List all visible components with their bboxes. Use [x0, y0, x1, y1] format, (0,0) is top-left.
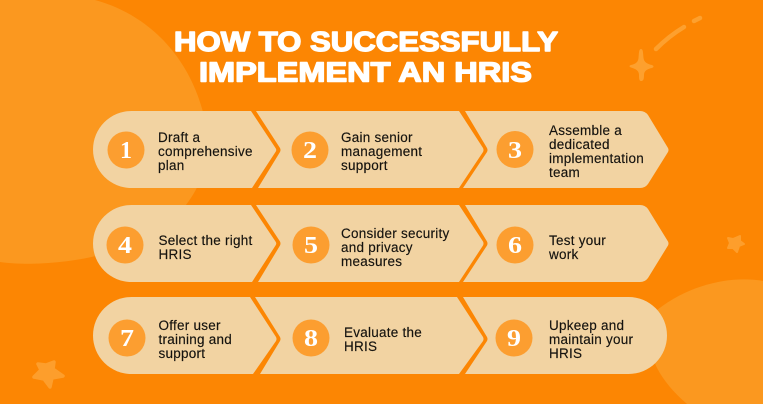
step 1: [93, 111, 276, 188]
step 7: [93, 297, 276, 374]
icon: star right: [728, 236, 744, 252]
background blob: bottom right: [650, 279, 763, 404]
step 4: Select the right: [158, 233, 253, 248]
title: IMPLEMENT AN HRIS: [199, 56, 532, 88]
step 9: HRIS: [549, 346, 582, 361]
step 3: implementation: [549, 151, 644, 166]
step 9: maintain your: [549, 332, 634, 347]
step 5: 5: [304, 233, 318, 259]
step 3: [463, 111, 668, 188]
step 9: Upkeep and: [549, 318, 624, 333]
step 2: support: [341, 158, 388, 173]
step 6: work: [548, 247, 579, 262]
step 1: comprehensive: [158, 144, 253, 159]
step 8: Evaluate the: [344, 325, 422, 340]
step 8: 8: [304, 326, 318, 352]
step 2: Gain senior: [341, 130, 413, 145]
step 7: Offer user: [158, 318, 221, 333]
step 8: HRIS: [344, 339, 377, 354]
step 2: 2: [303, 138, 317, 164]
step 4: HRIS: [158, 247, 192, 262]
step 6: Test your: [549, 233, 606, 248]
step 5: [256, 205, 484, 282]
step 4: [93, 205, 276, 282]
step 3: team: [549, 165, 580, 180]
step 5: measures: [341, 254, 402, 269]
step 1: 1: [120, 138, 132, 164]
step 3: dedicated: [549, 137, 610, 152]
decorative comet streak: [656, 18, 700, 49]
step 3: 3: [508, 138, 522, 164]
step 6: [463, 205, 668, 282]
step 2: management: [341, 144, 422, 159]
step 9: [463, 297, 667, 374]
title: [174, 26, 558, 88]
background blob: top left: [0, 0, 208, 264]
step 5: Consider security: [341, 226, 450, 241]
step 7: training and: [158, 332, 232, 347]
step 8: [255, 297, 484, 374]
step 7: 7: [120, 326, 134, 352]
step 7: support: [158, 346, 205, 361]
step 2: [256, 111, 484, 188]
step 1: plan: [158, 158, 185, 173]
step 3: Assemble a: [549, 123, 622, 138]
title: HOW TO SUCCESSFULLY: [174, 26, 558, 57]
icon: star bottom left: [34, 362, 63, 387]
step 5: and privacy: [341, 240, 413, 255]
step 6: 6: [508, 233, 522, 259]
step 4: 4: [118, 233, 132, 259]
icon: sparkle: [630, 49, 654, 81]
step 9: 9: [507, 326, 521, 352]
step 1: Draft a: [158, 130, 201, 145]
